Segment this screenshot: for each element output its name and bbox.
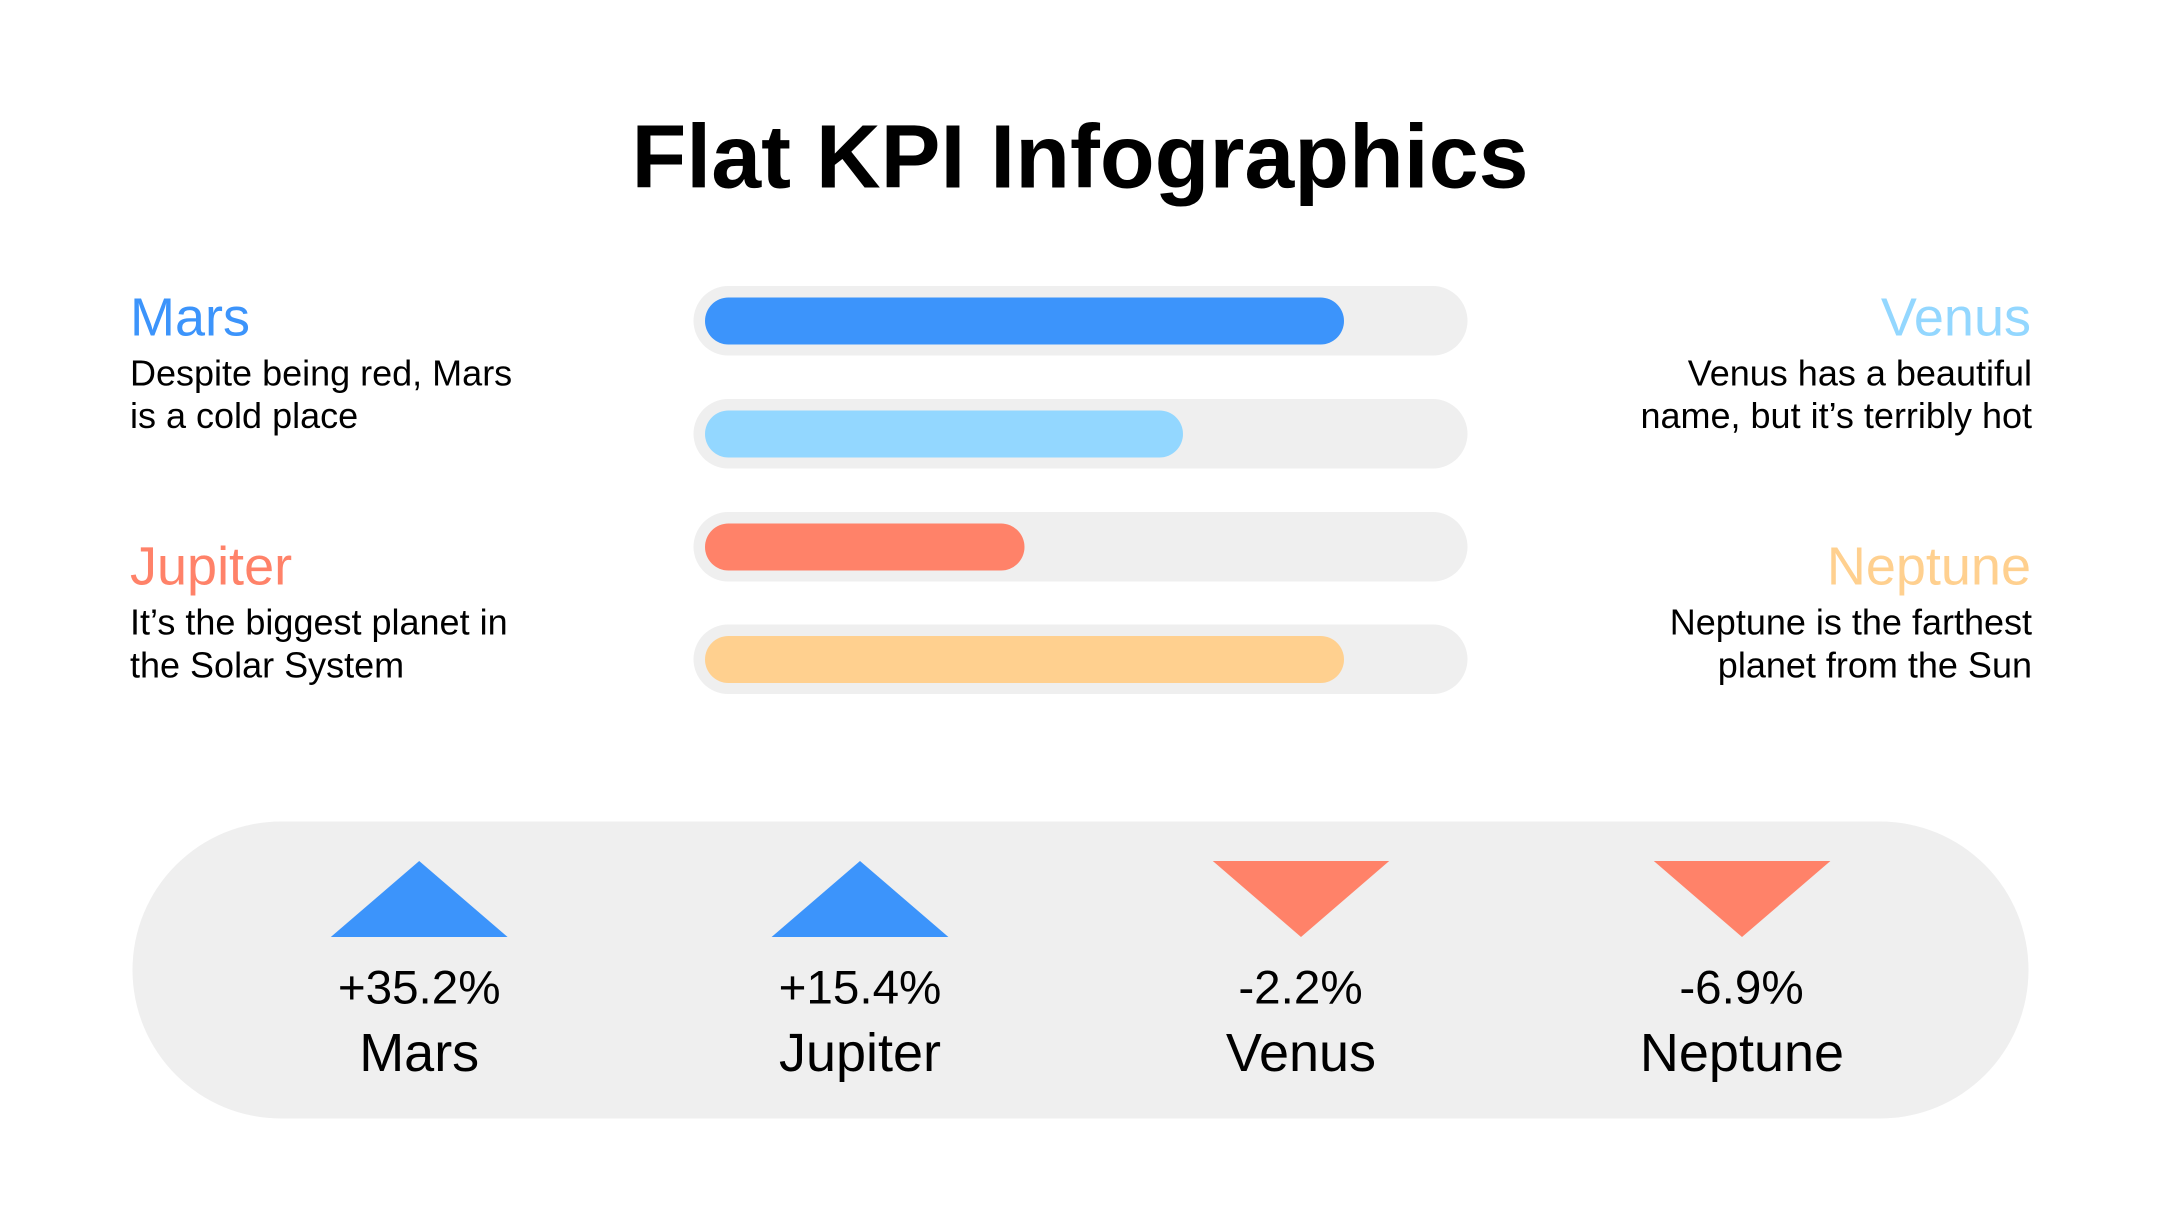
KPI: Mars xyxy=(331,861,508,1083)
value: Venus: -2.2% xyxy=(1238,962,1363,1014)
heading: Mars: Mars xyxy=(130,288,250,348)
KPI: Venus xyxy=(1213,861,1389,1083)
value: Mars: +35.2% xyxy=(338,962,501,1014)
KPI: Jupiter xyxy=(772,861,948,1083)
text block: Jupiter xyxy=(130,536,508,685)
label: Jupiter: Jupiter xyxy=(779,1023,941,1083)
description: Venus: name, but it’s terribly hot xyxy=(1640,395,2032,436)
text block: Neptune xyxy=(1670,536,2032,685)
heading: Jupiter: Jupiter xyxy=(130,536,292,596)
icon: down triangle xyxy=(1213,861,1389,937)
description: Neptune: planet from the Sun xyxy=(1718,644,2032,685)
description: Jupiter: It’s the biggest planet in xyxy=(130,602,508,643)
bar: Neptune xyxy=(694,624,1468,694)
icon: down triangle xyxy=(1654,861,1830,937)
bar: Jupiter xyxy=(694,512,1468,582)
value: Jupiter: +15.4% xyxy=(779,962,941,1014)
bar chart xyxy=(694,286,1468,694)
label: Neptune: Neptune xyxy=(1640,1023,1844,1083)
text block: Mars xyxy=(130,288,512,436)
description: Neptune: Neptune is the farthest xyxy=(1670,602,2032,643)
heading: Venus: Venus xyxy=(1881,288,2031,348)
bar: Venus xyxy=(694,399,1468,468)
title: Flat KPI Infographics xyxy=(632,108,1528,208)
KPI: Neptune xyxy=(1640,861,1844,1083)
icon: up triangle xyxy=(772,861,948,937)
description: Venus: Venus has a beautiful xyxy=(1688,352,2032,393)
label: Venus: Venus xyxy=(1226,1023,1376,1083)
icon: up triangle xyxy=(331,861,508,937)
description: Mars: Despite being red, Mars xyxy=(130,352,512,393)
panel: KPI summary xyxy=(132,822,2028,1118)
description: Jupiter: the Solar System xyxy=(130,644,404,685)
label: Mars: Mars xyxy=(359,1023,479,1083)
text block: Venus xyxy=(1640,288,2032,436)
bar: Mars xyxy=(694,286,1468,356)
description: Mars: is a cold place xyxy=(130,395,358,436)
heading: Neptune: Neptune xyxy=(1827,536,2031,596)
value: Neptune: -6.9% xyxy=(1679,962,1804,1014)
